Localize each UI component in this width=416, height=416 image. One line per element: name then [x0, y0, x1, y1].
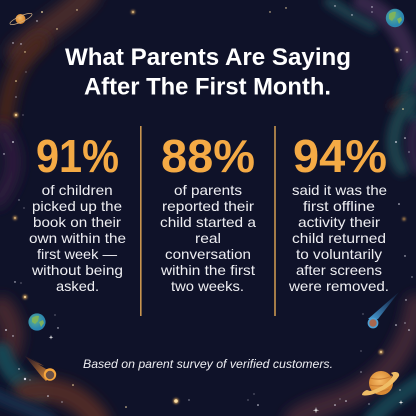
title: What Parents Are Saying [65, 44, 351, 71]
stat description: to voluntarily [296, 246, 382, 262]
stat description: after screens [296, 262, 382, 278]
icon: orange ringed planet [362, 371, 399, 396]
stat description: of parents [174, 182, 242, 198]
stat description: asked. [56, 278, 99, 294]
footnote: Based on parent survey of verified customers. [83, 357, 333, 371]
stat description: first offline [303, 198, 375, 214]
stat number: 94% [293, 130, 387, 182]
stat description: book on their [33, 214, 121, 230]
title: After The First Month. [84, 74, 331, 100]
stat description [29, 182, 126, 294]
stat description: real [195, 230, 221, 246]
icon: lower-left earth [28, 313, 46, 331]
stat description: were removed. [288, 278, 389, 294]
stat description: conversation [165, 246, 251, 262]
stat number: 88% [161, 130, 255, 182]
stat description: activity their [298, 214, 380, 230]
icon: top-right earth [386, 9, 404, 27]
stat description: reported their [162, 198, 254, 214]
stat description: two weeks. [171, 278, 244, 294]
stat column: 88% [160, 130, 256, 294]
stat description: said it was the [292, 182, 387, 198]
title [65, 44, 351, 100]
icon: top-left ringed planet [9, 11, 33, 27]
icon: orange comet [25, 356, 56, 381]
stat description: of children [42, 182, 113, 198]
stat description: without being [31, 262, 123, 278]
divider left [140, 126, 142, 316]
stat description [160, 182, 256, 294]
stat description: within the first [160, 262, 255, 278]
stat description: first week — [37, 246, 117, 262]
stat description [288, 182, 389, 294]
sparkles [49, 335, 403, 413]
stat description: own within the [29, 230, 126, 246]
stat description: child returned [292, 230, 386, 246]
stat description: picked up the [32, 198, 122, 214]
stat column: 91% [29, 130, 126, 294]
stat description: child started a [160, 214, 256, 230]
divider right [274, 126, 276, 316]
icon: blue comet [368, 292, 399, 328]
stat number: 91% [36, 130, 119, 182]
stat column: 94% [288, 130, 389, 294]
